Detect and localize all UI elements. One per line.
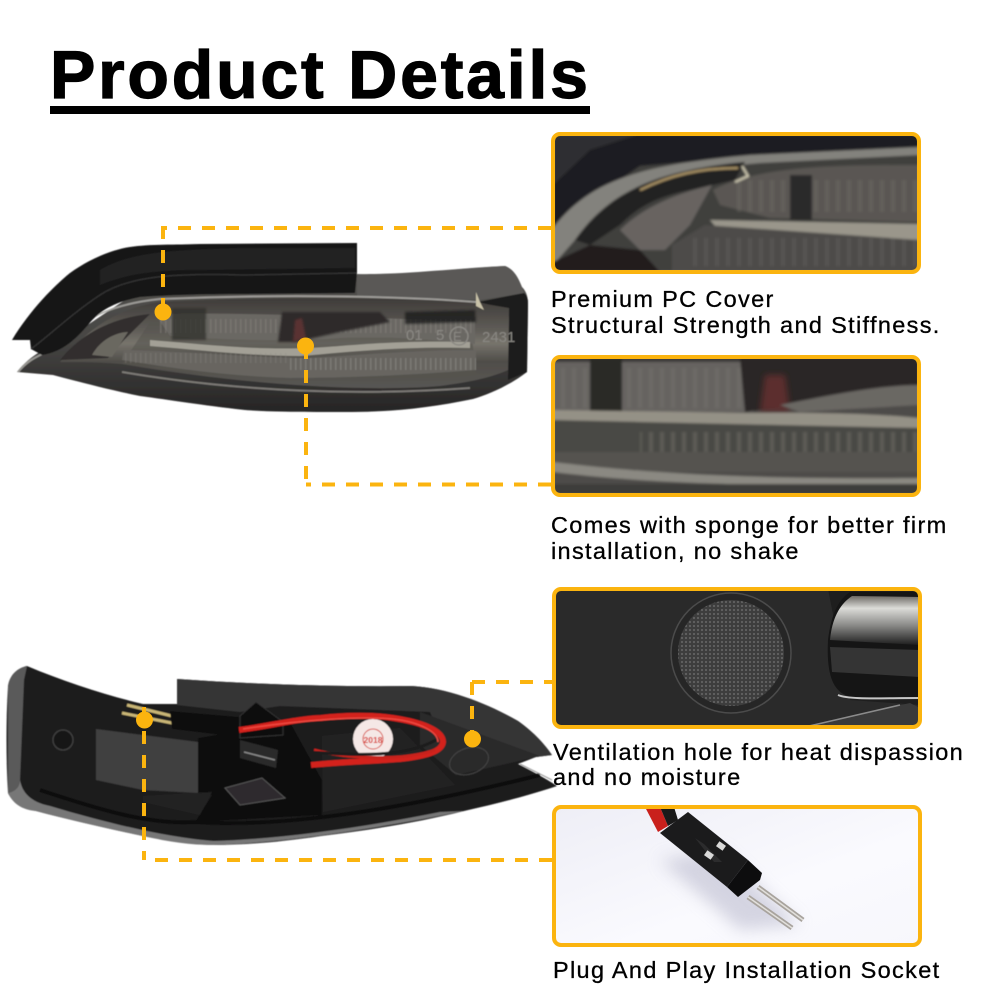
connector housing [170, 711, 240, 737]
text: sponge caption [551, 512, 948, 564]
mount hole [53, 730, 73, 750]
leader: vent vertical [470, 682, 474, 740]
embossed markings: 01 [406, 327, 423, 344]
top plate [177, 679, 552, 775]
bottom seam [40, 775, 540, 823]
text: PC cover caption: Structural Strength and Stiffness. [551, 312, 941, 338]
connector pins [122, 713, 172, 723]
LED strip lower [122, 350, 476, 378]
inner compartment [96, 729, 198, 793]
panel: ventilation hole detail [554, 589, 920, 727]
black trim [12, 243, 357, 355]
panel: PC cover detail [553, 134, 919, 272]
leader: vent [472, 680, 552, 684]
lens glass [60, 298, 509, 388]
title: Product Details: Product Details [50, 37, 591, 113]
date sticker [353, 719, 393, 759]
lamp body [17, 266, 528, 412]
product photo: mirror lamp front [12, 243, 528, 412]
product photo: mirror lamp front: 2431 [482, 329, 515, 346]
text: ventilation caption: and no moisture [553, 764, 741, 790]
lens rim [18, 296, 476, 372]
date sticker: 2018 [364, 735, 383, 745]
product photo: mirror lamp front: E [453, 329, 462, 344]
text: ventilation caption [553, 739, 964, 790]
leader: sponge [304, 346, 308, 484]
damper [232, 740, 248, 756]
light guide bright [150, 340, 470, 356]
leader: cover vertical [161, 226, 165, 312]
text: PC cover caption: Premium PC Cover [551, 286, 775, 312]
leader: socket vertical [142, 707, 146, 860]
leader: sponge horizontal [306, 482, 551, 486]
panel: sponge detail [553, 357, 919, 495]
text: ventilation caption: Ventilation hole for heat dispassion [553, 739, 964, 765]
leader lines [144, 226, 552, 860]
marker dots [136, 304, 481, 748]
wires [239, 716, 443, 765]
text: sponge caption: Comes with sponge for better firm [551, 512, 948, 538]
leader: socket horizontal [144, 858, 552, 862]
LED strip upper [155, 314, 475, 344]
upper housing grey [357, 266, 524, 300]
text: PC cover caption [551, 286, 941, 338]
shell [6, 666, 557, 845]
panel: plug socket detail [554, 807, 920, 945]
text: socket caption: Plug And Play Installation Socket [553, 957, 940, 983]
product photo: mirror lamp front: 5 [436, 327, 444, 344]
leader: cover [163, 226, 551, 230]
product photo: mirror lamp back [6, 666, 557, 845]
text: sponge caption: installation, no shake [551, 538, 800, 564]
